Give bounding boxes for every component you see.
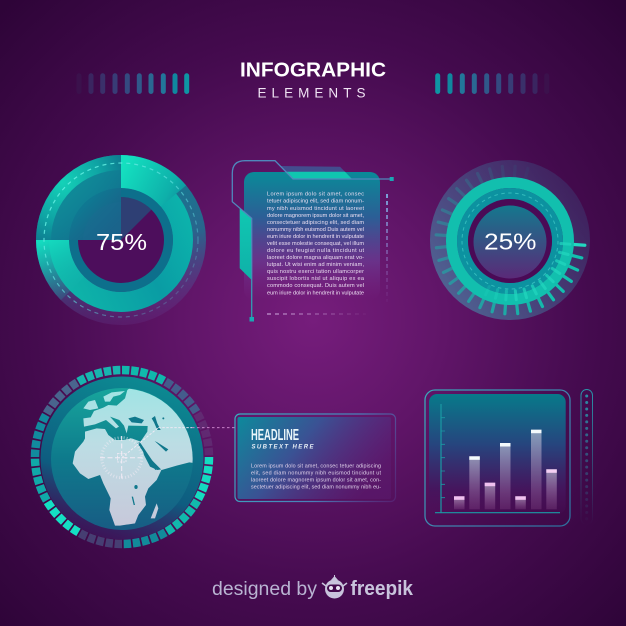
panel body text: eum iriure dolor in hendrerit in vulputate [267,234,364,240]
panel body text: my nibh euismod tincidunt ut laoreet [267,206,364,212]
footer credit: designed by [212,579,318,600]
panel body text: commodo consequat. Duis autem vel [267,283,364,289]
panel body text: dolore magnorem ipsum dolor sit amet, [267,213,364,219]
panel body text: nonummy nibh euismod Duis autem vel [267,227,364,233]
panel body text: dolore eu feugiat nulla tincidunt ut [267,248,364,254]
title: ELEMENTS [258,85,366,100]
panel body text: eum iriure dolor in hendrerit in vulputate [267,290,364,296]
subtext: SUBTEXT HERE [252,445,314,451]
vertical dashes [386,194,388,302]
headline text: HEADLINE [251,427,299,444]
panel body text: velit esse molestie consequat, vel illum [267,241,364,247]
panel body text: Lorem ipsum dolo sit amet, consec [267,192,364,198]
radial gauge 25% [430,160,590,320]
panel body text: quis nostru exerci tation ullamcorper [267,269,364,275]
icon: freepik mascot [322,575,347,598]
vertical scroll indicator [581,390,592,524]
axes [435,404,560,513]
panel body text: laoreet dolore magna aliquam erat vo- [267,255,364,261]
headline body text [251,464,382,490]
panel body text: suscipit lobortis nisl ut aliquip ex ea [267,276,365,282]
headline panel [235,414,396,502]
headline body text: elit, sed diam nonummy nibh euismod tincidunt ut [251,470,382,476]
headline body text: laoreet dolore magnorem ipsum dolor sit amet, con- [251,478,381,484]
horizontal dashes [267,313,366,315]
panel body text: consectetuer adipiscing elit, sed diam [267,220,364,226]
globe widget [35,370,235,544]
circuit line [232,161,392,319]
main ring segment [49,168,193,312]
radial gauge 25%: 25% [484,228,536,254]
bright top wedge [121,155,186,207]
bar chart [425,390,570,526]
panel body text: lutpat. Ut wisi enim ad minim veniam, [267,262,364,268]
title: INFOGRAPHIC [240,58,386,82]
continents [72,388,193,526]
bright lower-left wedge [36,240,84,300]
gauge ticks [436,166,585,314]
segmented outer ring [35,370,209,544]
left header bars [76,73,189,94]
bright tick overlay [486,244,570,300]
headline body text: sectetuer adipiscing elit, sed diam nonummy nibh eu- [251,484,381,490]
right header bars [435,73,549,94]
title [240,58,386,100]
footer credit: freepik [350,578,414,600]
circuit node right [390,177,394,181]
circuit node bottom [250,317,254,322]
panel body text: tetuer adipiscing elit, sed diam nonum- [267,199,364,205]
target crosshair and pointer [100,428,235,480]
bars [454,430,557,509]
panel body text [267,192,365,296]
left tab [240,208,252,280]
headline body text: Lorem ipsum dolo sit amet, consec tetuer adipiscing [251,464,381,470]
footer credit [212,575,414,600]
donut chart 75%: 75% [96,229,147,255]
donut chart 75% [36,155,206,325]
bar caps [454,430,557,500]
text panel [232,161,394,322]
top tab [280,166,352,179]
